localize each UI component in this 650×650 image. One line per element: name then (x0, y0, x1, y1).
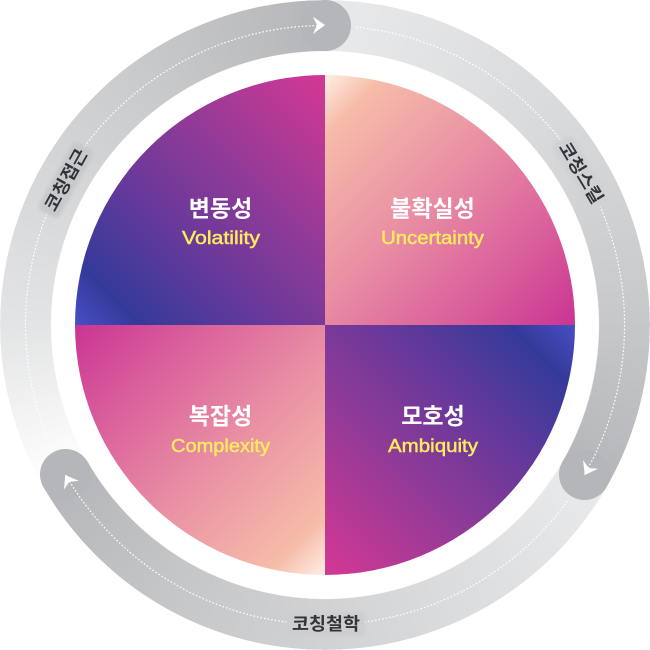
heading: volatility korean: 변동성 (189, 190, 252, 224)
arc: coaching philosophy (40, 449, 604, 650)
label: coaching approach: 코칭접근 (38, 144, 93, 216)
arrowhead: right (577, 460, 598, 479)
arc: coaching skill (328, 0, 650, 500)
arrowhead: left (58, 470, 79, 490)
dotted path: coaching approach (25, 26, 320, 447)
quadrant: volatility (75, 75, 325, 325)
quadrant: complexity (75, 325, 325, 575)
heading: complexity korean: 복잡성 (189, 397, 252, 431)
heading: uncertainty korean: 불확실성 (390, 190, 475, 224)
arrowhead: top (313, 17, 325, 34)
text: ambiguity english: Ambiquity (388, 436, 478, 456)
quadrant: ambiguity (325, 325, 575, 575)
quadrant: uncertainty (325, 75, 575, 325)
text: complexity english: Complexity (171, 436, 270, 456)
label: coaching skill: 코칭스킬 (553, 137, 610, 208)
text: uncertainty english: Uncertainty (381, 228, 484, 248)
arc: coaching approach (0, 0, 351, 442)
heading: ambiguity korean: 모호성 (401, 397, 465, 431)
label: coaching philosophy: 코칭철학 (292, 611, 360, 636)
dotted path: coaching skill (356, 27, 625, 475)
text: volatility english: Volatility (182, 228, 260, 248)
dotted path: coaching philosophy (66, 475, 567, 625)
